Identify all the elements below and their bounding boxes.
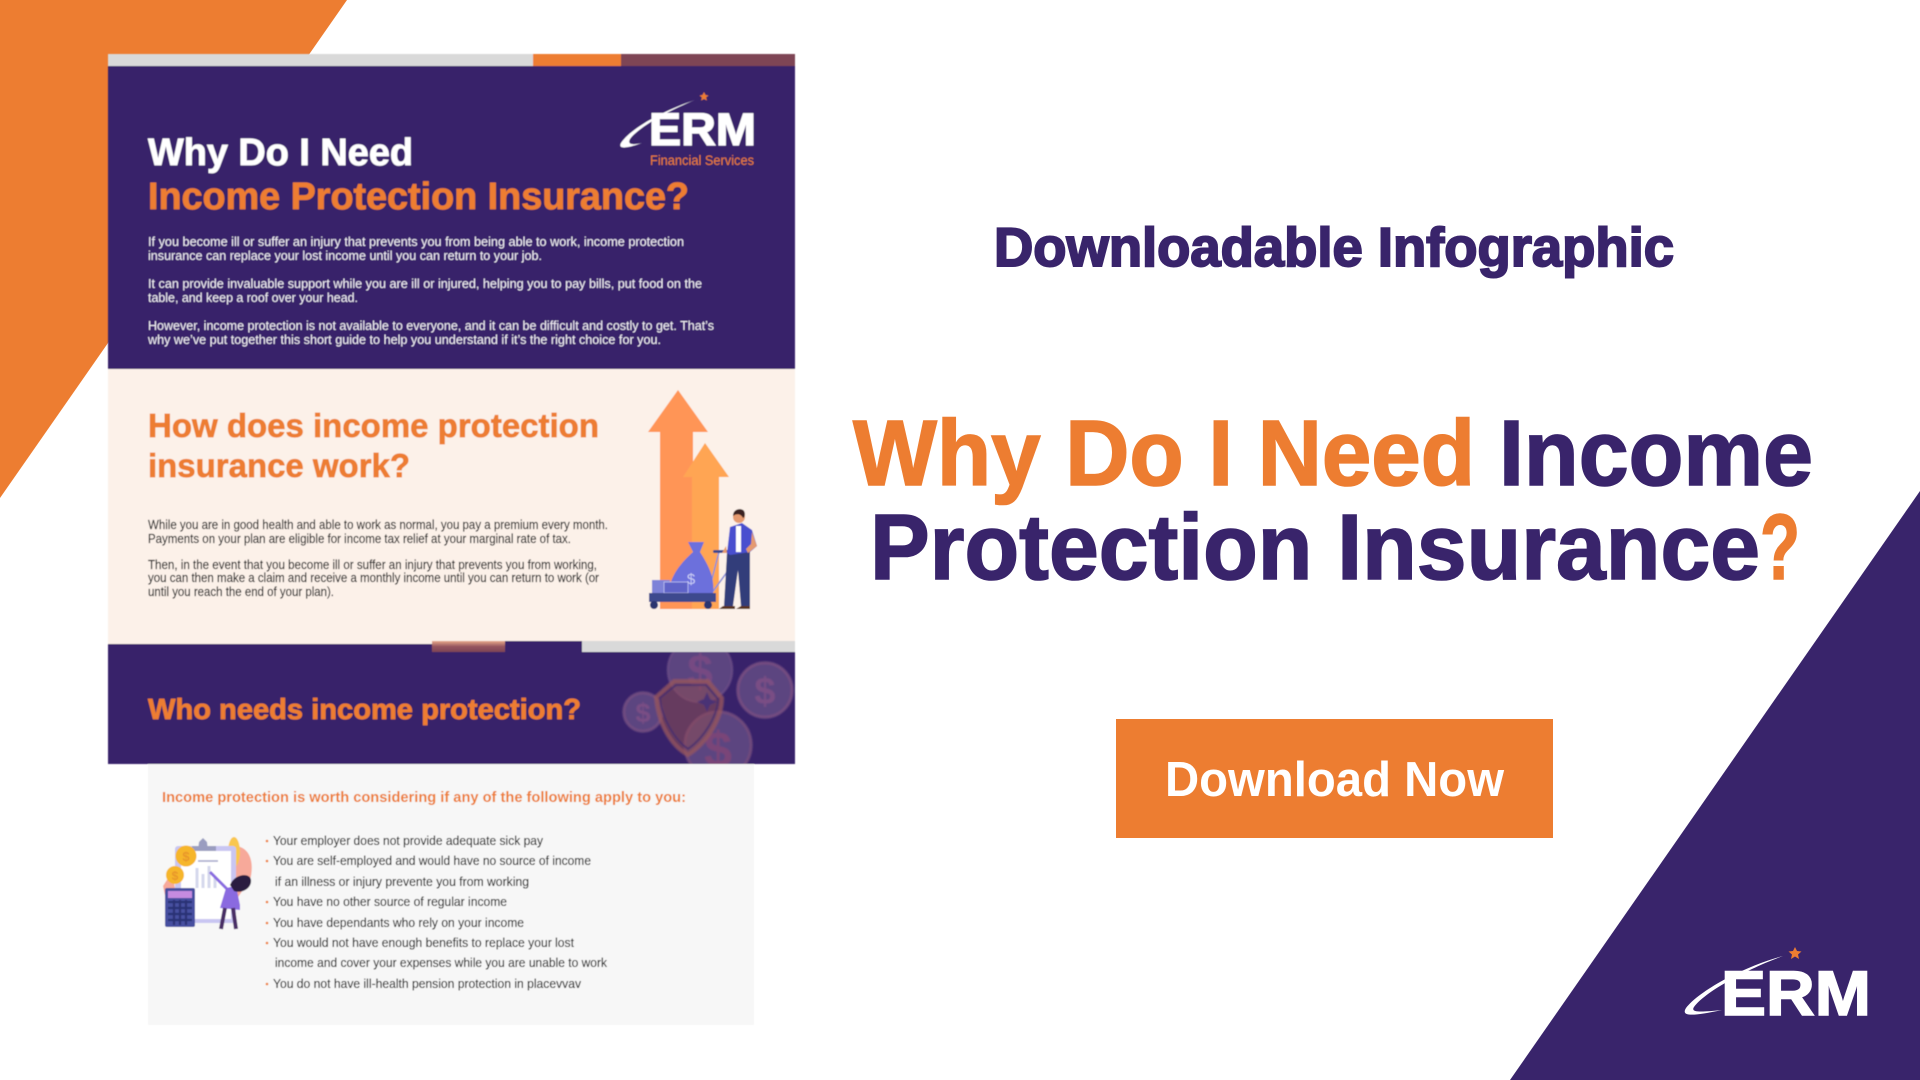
bullet list: You are self-employed and would have no source of income — [273, 854, 591, 868]
icon: clipboard, calculator and woman: $ — [172, 869, 179, 883]
icon: arrows and man with money cart: $ — [687, 571, 696, 588]
how it works text — [148, 517, 608, 599]
intro text: insurance can replace your lost income until you can return to your job. — [148, 248, 542, 263]
logo: ERM bottom right — [1685, 947, 1871, 1029]
logo: ERM Financial Services: ERM — [649, 104, 756, 155]
intro text: table, and keep a roof over your head. — [148, 290, 358, 305]
panel: who it applies to — [148, 764, 754, 1025]
main title: Income — [1499, 401, 1813, 505]
heading: how does income protection work: insurance work? — [148, 447, 410, 484]
logo: ERM Financial Services — [620, 92, 756, 168]
how it works text: until you reach the end of your plan). — [148, 584, 334, 599]
icon: coins and shield: $ — [635, 698, 651, 728]
bullet list: income and cover your expenses while you are unable to work — [275, 956, 608, 970]
how it works text: While you are in good health and able to work as normal, you pay a premium every month. — [148, 517, 608, 532]
icon: clipboard, calculator and woman — [163, 837, 252, 929]
top colour strip — [108, 54, 795, 66]
icon: coins and shield: $ — [754, 671, 776, 713]
bullet list: You do not have ill-health pension protection in placevvav — [273, 977, 582, 991]
icon: arrows and man with money cart — [648, 390, 757, 609]
intro text: If you become ill or suffer an injury that prevents you from being able to work, income protection — [148, 234, 684, 249]
bullet list: You have dependants who rely on your income — [273, 916, 524, 930]
logo: ERM Financial Services: Financial Services — [650, 152, 754, 168]
how it works text: Payments on your plan are eligible for income tax relief at your marginal rate of tax. — [148, 531, 571, 546]
panel: intro header — [108, 66, 795, 369]
main title: Protection Insurance — [870, 495, 1760, 599]
bullet list: Your employer does not provide adequate sick pay — [273, 834, 544, 848]
middle colour strip — [432, 641, 795, 652]
heading: who needs income protection: Who needs income protection? — [148, 694, 581, 726]
main title: Why Do I Need — [853, 401, 1475, 505]
bullet list: if an illness or injury prevente you from working — [275, 875, 529, 889]
icon: clipboard, calculator and woman: $ — [182, 849, 190, 864]
orange corner shape — [0, 0, 347, 498]
how it works text: Then, in the event that you become ill or suffer an injury that prevents you from working, — [148, 557, 597, 572]
bullet list — [266, 834, 608, 991]
button: download now: Download Now — [1165, 753, 1505, 807]
logo: ERM bottom right: ERM — [1721, 959, 1871, 1029]
heading: how does income protection work: How does income protection — [148, 407, 599, 444]
subheading: worth considering: Income protection is worth considering if any of the following apply to you: — [162, 789, 686, 806]
intro text: why we’ve put together this short guide to help you understand if it’s the right choice for you. — [147, 332, 661, 347]
infographic preview panel — [108, 54, 795, 1025]
icon: coins and shield: $ — [704, 722, 732, 778]
bullet list: You have no other source of regular income — [273, 895, 507, 909]
how it works text: you can then make a claim and receive a monthly income until you can return to work (or — [148, 570, 600, 585]
button: download now — [1116, 719, 1553, 838]
panel: who needs income protection — [108, 644, 795, 764]
intro text: It can provide invaluable support while you are ill or injured, helping you to pay bills, put food on the — [148, 276, 702, 291]
panel: how does it work — [108, 369, 795, 644]
heading: downloadable infographic: Downloadable Infographic — [994, 216, 1674, 278]
icon: coins and shield — [622, 652, 794, 764]
heading: income protection insurance: Income Protection Insurance? — [148, 176, 689, 218]
icon: coins and shield: $ — [687, 645, 713, 697]
intro text: However, income protection is not available to everyone, and it can be difficult and costly to get. That’s — [148, 318, 714, 333]
heading: how does income protection work — [148, 407, 599, 484]
heading: why do I need: Why Do I Need — [148, 132, 413, 174]
purple corner triangle — [1510, 491, 1920, 1080]
intro text — [147, 234, 714, 347]
main title: ? — [1760, 495, 1800, 599]
main title — [853, 401, 1813, 599]
bullet list: You would not have enough benefits to replace your lost — [273, 936, 574, 950]
